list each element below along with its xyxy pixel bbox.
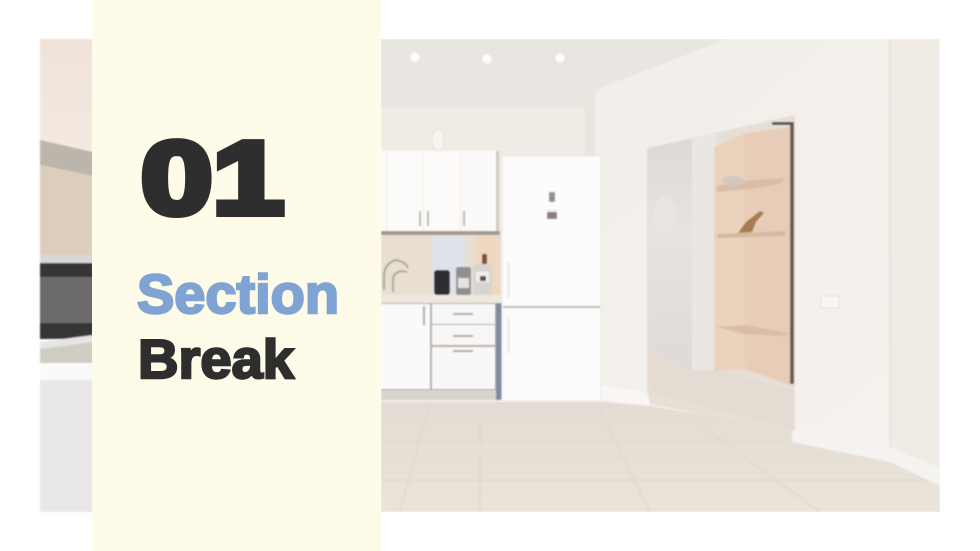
background wall [381, 39, 940, 512]
cream side panel [92, 0, 381, 551]
main kitchen photo [381, 39, 940, 512]
floor [381, 402, 940, 512]
skirting [601, 386, 650, 406]
kitchen back wall [381, 108, 585, 238]
backsplash with appliances [381, 235, 501, 296]
right wall section [890, 39, 940, 512]
bust on cabinet [432, 129, 444, 151]
wooden shelf unit [714, 122, 794, 385]
lower cabinets [381, 303, 503, 400]
heading word: Section: Section [137, 263, 339, 325]
upper cabinets [381, 151, 500, 235]
refrigerator [502, 156, 601, 401]
left kitchen photo strip [40, 39, 93, 512]
ceiling [381, 39, 727, 108]
heading: Section Break [137, 263, 339, 390]
doorway [647, 115, 795, 432]
countertop [381, 295, 502, 303]
heading word: Break: Break [138, 328, 294, 390]
light switch [821, 296, 839, 308]
section number: 01 [141, 120, 284, 236]
